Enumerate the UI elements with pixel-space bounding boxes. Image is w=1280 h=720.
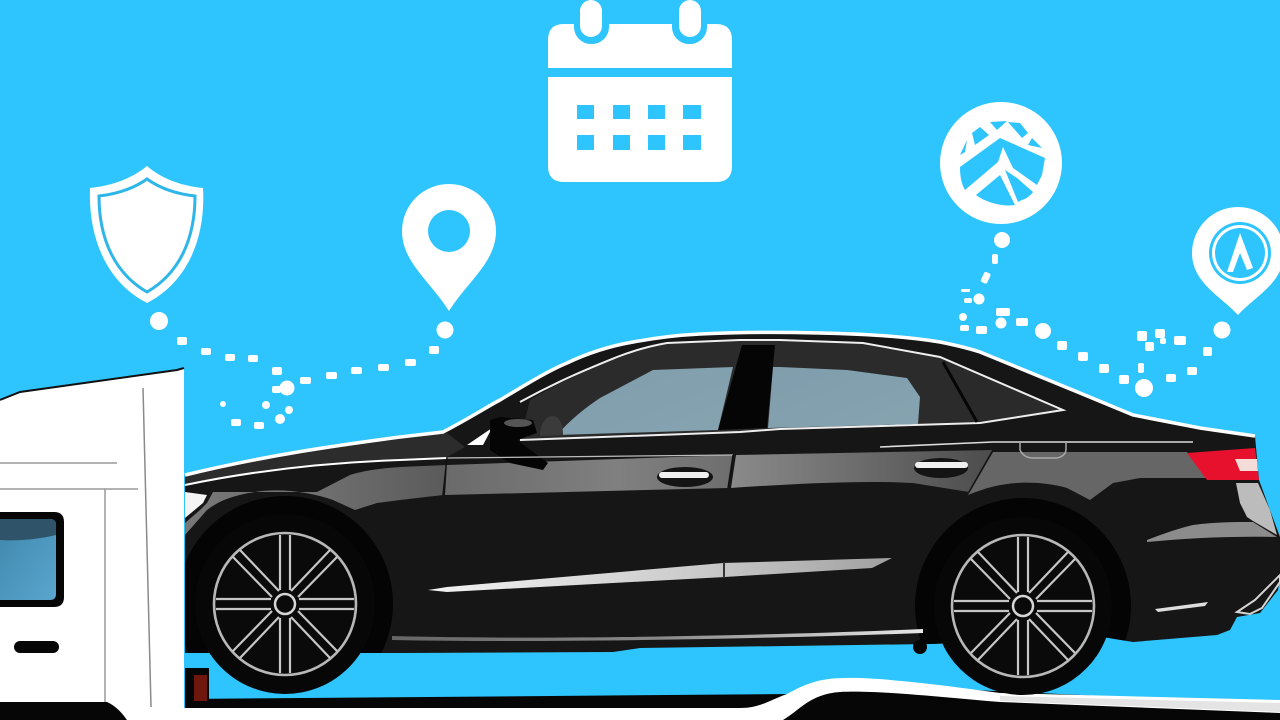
icon: location pin xyxy=(402,184,496,311)
seat shade xyxy=(540,416,563,436)
window surround xyxy=(520,340,1063,440)
icon: globe badge xyxy=(940,102,1062,224)
truck window xyxy=(0,512,64,607)
front door reflection xyxy=(445,455,733,495)
mirror xyxy=(490,417,548,470)
headlight xyxy=(185,492,207,518)
car body xyxy=(185,332,1280,653)
rear door handle xyxy=(914,458,968,478)
front door handle xyxy=(657,467,713,487)
truck cab xyxy=(0,368,184,720)
roof edge highlight xyxy=(185,332,1255,475)
rear lower trim xyxy=(1155,602,1208,612)
rear lower reflection xyxy=(1147,522,1277,542)
front window xyxy=(557,367,733,435)
right dotted route xyxy=(959,232,1230,397)
truck door handle xyxy=(14,641,59,653)
icon: calendar xyxy=(548,0,732,182)
window frame line xyxy=(520,340,1063,440)
truck wheel arch xyxy=(0,702,127,720)
belt lines xyxy=(447,455,733,458)
exhaust xyxy=(1237,575,1280,614)
rear fender reflection xyxy=(968,452,1207,500)
hood top tone xyxy=(185,433,465,486)
quarter post xyxy=(943,362,977,422)
door seams xyxy=(443,450,993,495)
jack point xyxy=(913,640,927,654)
rear door reflection xyxy=(731,450,993,492)
icon: badge location pin xyxy=(1192,207,1280,315)
rear corner reflection xyxy=(1236,483,1277,535)
icon: shield xyxy=(90,166,203,303)
ramp: flatbed xyxy=(152,668,1280,720)
quarter window xyxy=(950,367,1047,422)
sill highlight xyxy=(392,629,923,641)
left dotted route xyxy=(150,312,454,429)
car xyxy=(177,332,1280,714)
fuel flap xyxy=(1020,441,1066,458)
pillar xyxy=(718,345,775,430)
tail light xyxy=(1187,448,1259,480)
rear window xyxy=(768,367,920,428)
front wheel xyxy=(195,514,375,694)
windshield glint xyxy=(467,428,492,445)
front fender reflection xyxy=(185,465,447,535)
hood crease xyxy=(185,458,447,485)
side strip xyxy=(428,558,892,592)
rear wheel xyxy=(934,517,1112,695)
wheel arches xyxy=(185,496,1131,653)
